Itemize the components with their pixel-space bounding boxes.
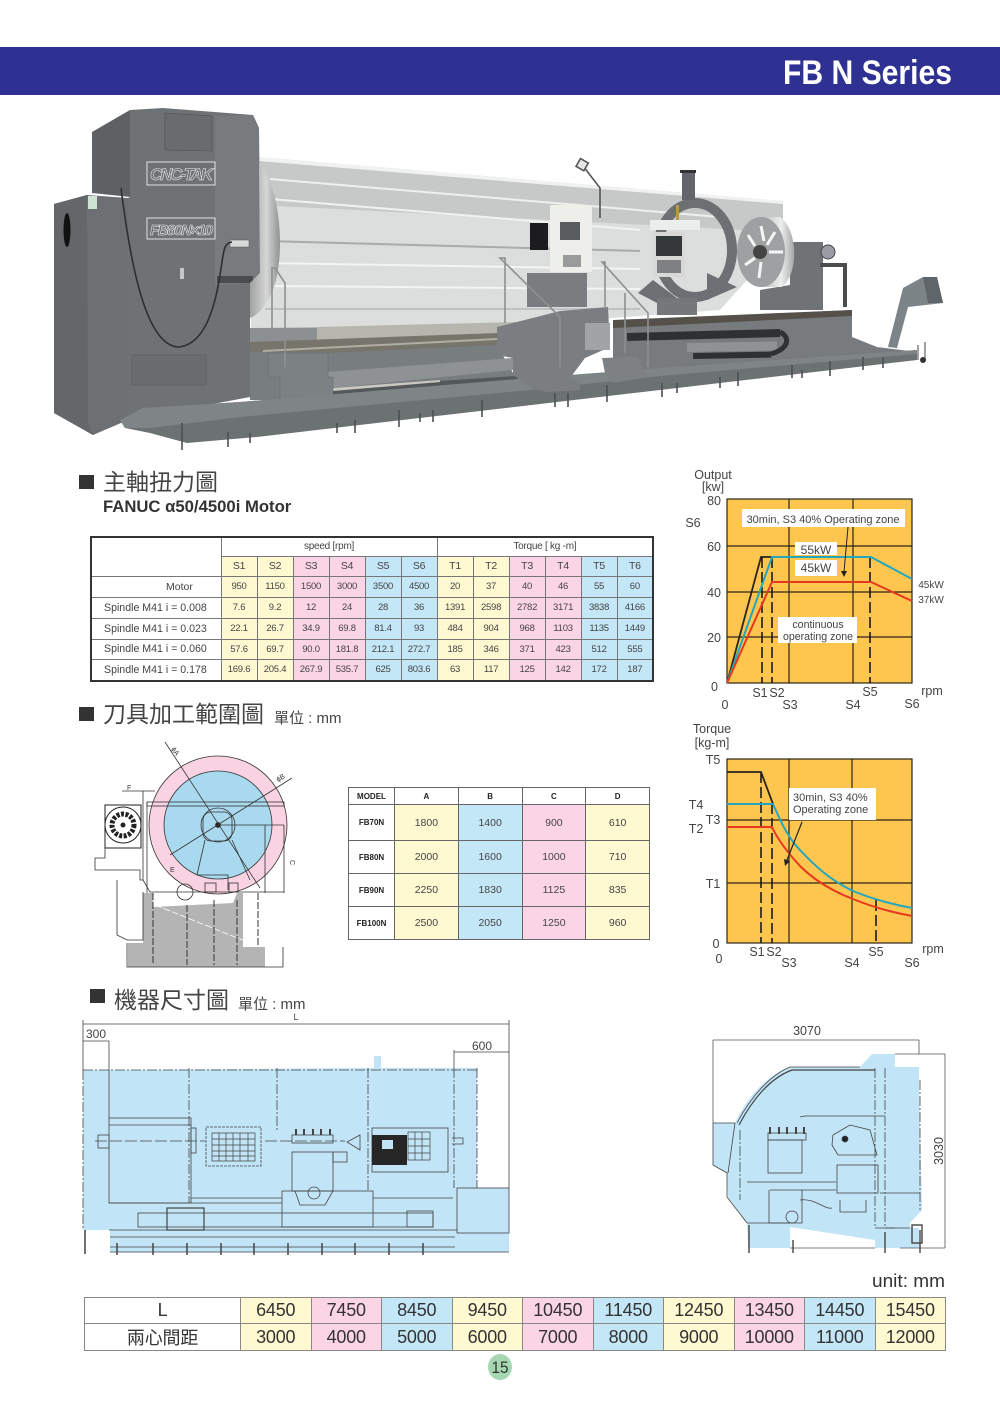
spindle speed and torque table: 968: [520, 623, 535, 634]
output power chart: [685, 468, 944, 712]
ventilation grids: [212, 1132, 430, 1161]
machine feet: [182, 357, 883, 450]
spindle speed and torque table: 512: [592, 644, 607, 654]
model dimensions table: 1830: [478, 884, 502, 896]
spindle speed and torque table: Spindle M41 i = 0.008: [104, 602, 207, 614]
zone callouts: continuous: [792, 619, 844, 631]
spindle speed and torque table: 187: [627, 664, 642, 675]
spindle speed and torque table: 57.6: [230, 644, 248, 654]
spindle speed and torque table: Torque [ kg -m]: [513, 541, 576, 552]
spindle speed and torque table: 272.7: [408, 644, 430, 654]
length and centre distance table: 12000: [886, 1326, 935, 1346]
torque axis labels: 0: [713, 937, 720, 951]
spindle speed and torque table: 555: [627, 644, 642, 654]
spindle speed and torque table: 3838: [589, 602, 609, 613]
spindle speed and torque table: [90, 536, 654, 682]
torque axis labels: rpm: [922, 942, 944, 956]
machine outline: [83, 1068, 509, 1252]
large chuck edge: [250, 163, 280, 318]
length and centre distance table: L: [158, 1300, 167, 1320]
length and centre distance table: 3000: [256, 1326, 295, 1346]
length and centre distance table: [84, 1297, 946, 1351]
long bed with covers: [250, 322, 530, 400]
section heading: dimensions: 單位 : mm: [238, 996, 306, 1013]
torque axis labels: [689, 722, 944, 970]
torque axis labels: S1: [749, 945, 765, 959]
length and centre distance table: 6450: [256, 1300, 295, 1320]
model dimensions table: FB100N: [357, 918, 386, 928]
section heading: spindle torque: [79, 469, 292, 516]
model dimensions table: 1250: [542, 917, 566, 929]
model dimensions table: 2000: [415, 851, 438, 863]
spindle speed and torque table: 36: [414, 602, 424, 613]
front elevation drawing: 600: [472, 1039, 492, 1053]
carriage and white controller: [497, 205, 648, 392]
length and centre distance table: 9450: [468, 1300, 507, 1320]
model dimensions table: 1125: [543, 884, 565, 896]
outer swing circle A: [149, 756, 287, 894]
length and centre distance table: 12450: [674, 1300, 723, 1320]
spindle speed and torque table: T1: [449, 560, 461, 572]
dimension 3070: [713, 1040, 945, 1248]
model dimensions table: 835: [609, 884, 626, 896]
spindle speed and torque table: 181.8: [336, 644, 358, 654]
axis labels: 45kW: [918, 580, 944, 591]
zone callouts: 30min, S3 40% Operating zone: [747, 514, 899, 526]
front elevation drawing: 300: [86, 1027, 106, 1041]
zone callouts: [742, 509, 905, 643]
spindle speed and torque table: Spindle M41 i = 0.178: [104, 664, 207, 676]
motor subtitle: FANUC α50/4500i Motor: [103, 497, 292, 516]
headstock: [760, 242, 847, 310]
torque axis labels: S2: [766, 945, 782, 959]
zone callouts: 45kW: [801, 561, 832, 575]
spindle tower: CNC-TAK: [150, 165, 215, 184]
front elevation drawing: [83, 1012, 509, 1255]
plot area: [727, 499, 912, 683]
length and centre distance table: 5000: [397, 1326, 436, 1346]
spindle speed and torque table: 20: [450, 581, 460, 592]
axis labels: [kw]: [702, 480, 724, 494]
axis labels: 20: [707, 631, 721, 645]
spindle speed and torque table: 185: [448, 644, 463, 654]
spindle speed and torque table: 46: [558, 581, 568, 592]
end view outline: [713, 1067, 920, 1228]
model dimensions table: FB80N: [359, 852, 384, 862]
zone callouts: operating zone: [783, 631, 853, 643]
model dimensions table: MODEL: [357, 792, 386, 800]
torque axis labels: T4: [689, 798, 703, 812]
spindle speed and torque table: S6: [413, 560, 425, 572]
spindle speed and torque table: 423: [556, 644, 571, 654]
spindle speed and torque table: 1449: [625, 623, 645, 634]
model dimensions table: 900: [545, 816, 563, 828]
length and centre distance table: 7000: [538, 1326, 577, 1346]
axis labels: 80: [707, 494, 721, 508]
spindle speed and torque table: 117: [484, 664, 498, 675]
model dimensions table: A: [423, 792, 429, 800]
axis labels: 0: [711, 680, 718, 694]
spindle speed and torque table: 4166: [625, 602, 645, 613]
spindle tower: FB80N×10: [150, 222, 214, 239]
axis labels: S5: [862, 685, 878, 699]
machine photo: CNC lathe: [54, 108, 943, 450]
model dimensions table: 2250: [415, 884, 438, 896]
axis labels: S6: [685, 516, 701, 530]
model dimensions table: [348, 787, 650, 940]
model dimensions table: 2500: [415, 917, 438, 929]
end elevation drawing: [713, 1024, 946, 1253]
spindle speed and torque table: T4: [557, 560, 569, 572]
spindle speed and torque table: 1135: [589, 623, 609, 634]
spindle speed and torque table: 3000: [337, 581, 357, 592]
spindle speed and torque table: 3500: [373, 581, 393, 592]
model dimensions table: 2050: [478, 917, 502, 929]
unit label: unit: mm: [872, 1271, 945, 1291]
torque axis labels: S6: [904, 956, 920, 970]
spindle speed and torque table: 4500: [409, 581, 429, 592]
spindle speed and torque table: Spindle M41 i = 0.023: [104, 622, 207, 634]
elevation silhouette: [83, 1056, 509, 1252]
spindle speed and torque table: S3: [305, 560, 317, 572]
axis labels: 60: [707, 540, 721, 554]
torque plot area: [727, 759, 912, 943]
front elevation drawing: L: [293, 1012, 299, 1022]
spindle speed and torque table: 142: [556, 664, 571, 675]
model dimensions table: 1800: [415, 816, 438, 828]
section heading: dimensions: [90, 987, 306, 1013]
model dimensions table: 960: [609, 917, 626, 929]
torque axis labels: Torque: [693, 722, 731, 736]
model dimensions table: 1600: [478, 851, 502, 863]
spindle speed and torque table: 12: [306, 602, 316, 613]
spindle speed and torque table: 172: [592, 664, 607, 675]
axis labels: Output: [694, 468, 732, 482]
spindle speed and torque table: 7.6: [233, 602, 245, 613]
spindle speed and torque table: Motor: [166, 580, 193, 592]
spindle speed and torque table: 26.7: [266, 623, 284, 634]
spindle speed and torque table: 1150: [265, 581, 285, 592]
length and centre distance table: 8450: [397, 1300, 436, 1320]
tool range diagram: ϕB: [276, 773, 287, 784]
spindle speed and torque table: 9.2: [269, 602, 281, 613]
torque callout: 30min, S3 40%: [793, 792, 868, 804]
spindle speed and torque table: speed [rpm]: [304, 541, 354, 552]
control block: [372, 1135, 407, 1165]
spindle speed and torque table: 1103: [553, 623, 573, 634]
length and centre distance table: 11000: [816, 1326, 864, 1346]
spindle speed and torque table: 169.6: [228, 664, 250, 675]
model dimensions table: C: [551, 792, 557, 800]
dimension lines: [83, 1020, 509, 1188]
spindle speed and torque table: 346: [484, 644, 499, 654]
length and centre distance table: 15450: [886, 1300, 935, 1320]
feet: [85, 1230, 423, 1255]
spindle speed and torque table: 484: [448, 623, 463, 634]
inner swing circle B: [164, 771, 272, 879]
length and centre distance table: 9000: [679, 1326, 718, 1346]
feet of end view: [749, 1225, 922, 1253]
turret: [105, 805, 141, 848]
torque chart: [689, 722, 944, 970]
spindle speed and torque table: 1500: [301, 581, 321, 592]
spindle speed and torque table: 125: [520, 664, 535, 675]
NC operation panel: [650, 220, 700, 277]
spindle speed and torque table: 803.6: [408, 664, 430, 675]
stair rails and work lamp: [272, 159, 648, 367]
header band: [0, 47, 1000, 95]
spindle speed and torque table: 535.7: [336, 664, 358, 675]
spindle speed and torque table: 625: [375, 664, 391, 675]
spindle speed and torque table: 2782: [517, 602, 537, 613]
model dimensions table: 1000: [542, 851, 566, 863]
spindle speed and torque table: T3: [521, 560, 533, 572]
page number badge: 15: [492, 1358, 508, 1377]
section heading: tool range: 刀具加工範圍圖: [103, 701, 264, 727]
torque axis labels: [kg-m]: [695, 736, 729, 750]
model dimensions table: D: [615, 792, 621, 800]
spindle speed and torque table: 81.4: [374, 623, 392, 634]
tool range diagram: [95, 742, 295, 967]
length and centre distance table: 6000: [468, 1326, 507, 1346]
base plinth: [120, 350, 917, 443]
spindle speed and torque table: S5: [377, 560, 389, 572]
axis labels: rpm: [921, 684, 943, 698]
model dimensions table: 1400: [478, 816, 502, 828]
dimension 3030: 3030: [932, 1137, 946, 1165]
guard panel: [250, 157, 783, 345]
spindle speed and torque table: S4: [341, 560, 353, 572]
length and centre distance table: 10450: [533, 1300, 582, 1320]
spindle speed and torque table: S1: [233, 560, 245, 572]
model dimensions table: FB90N: [359, 886, 384, 894]
axis labels: S4: [845, 698, 861, 712]
torque axis labels: T3: [706, 813, 720, 827]
torque axis labels: T2: [689, 822, 703, 836]
axis labels: 40: [707, 586, 721, 600]
section heading: tool range: [79, 701, 342, 727]
torque axis labels: T5: [706, 753, 720, 767]
spindle speed and torque table: T2: [485, 560, 497, 572]
length and centre distance table: 13450: [745, 1300, 794, 1320]
axis labels: 0: [722, 698, 729, 712]
spindle speed and torque table: 55: [594, 581, 604, 592]
spindle speed and torque table: 40: [522, 581, 532, 592]
spindle speed and torque table: 37: [486, 581, 496, 592]
grey bed section: [128, 893, 265, 967]
spindle cable: [121, 188, 232, 347]
drawing linework: [95, 742, 292, 967]
end silhouette: [713, 1054, 922, 1248]
spindle speed and torque table: T5: [593, 560, 605, 572]
end elevation drawing: 3070: [793, 1024, 821, 1038]
axis labels: S3: [782, 698, 798, 712]
axis labels: [685, 468, 944, 712]
spindle speed and torque table: 267.9: [300, 664, 322, 675]
torque axis labels: S3: [781, 956, 797, 970]
model dimensions table: B: [487, 792, 493, 800]
curves: [727, 557, 772, 683]
spindle speed and torque table: S2: [269, 560, 281, 572]
page number badge: [488, 1354, 512, 1380]
torque callout: Operating zone: [793, 804, 868, 816]
left electrical cabinet: [54, 195, 128, 435]
spindle speed and torque table: Spindle M41 i = 0.060: [104, 643, 207, 655]
spindle speed and torque table: 371: [520, 644, 535, 654]
torque callout: [784, 788, 876, 866]
torque axis labels: S5: [868, 945, 884, 959]
axis labels: S1: [752, 686, 768, 700]
tool range diagram: C: [288, 860, 295, 865]
length and centre distance table: 7450: [327, 1300, 366, 1320]
model dimensions table: 610: [609, 816, 626, 828]
length and centre distance table: 8000: [609, 1326, 648, 1346]
spindle speed and torque table: 2598: [481, 602, 501, 613]
length and centre distance table: 14450: [815, 1300, 864, 1320]
spindle speed and torque table: 90.0: [302, 644, 320, 654]
torque axis labels: 0: [716, 952, 723, 966]
faceplate chuck: [737, 217, 794, 287]
spindle speed and torque table: 1391: [445, 602, 465, 613]
steady rest ring: [638, 170, 737, 315]
spindle speed and torque table: 22.1: [230, 623, 248, 634]
drawing linework: F: [127, 785, 131, 792]
spindle speed and torque table: 69.7: [266, 644, 284, 654]
spindle speed and torque table: 904: [484, 623, 499, 634]
tool range diagram: E: [170, 867, 175, 874]
spindle speed and torque table: 28: [378, 602, 388, 613]
model dimensions table: FB70N: [359, 818, 384, 827]
model dimensions table: 710: [609, 851, 626, 863]
length and centre distance table: 4000: [327, 1326, 366, 1346]
axis labels: S2: [769, 686, 785, 700]
right bed: [613, 310, 917, 380]
section heading: spindle torque: 主軸扭力圖: [103, 469, 218, 495]
spindle speed and torque table: 950: [231, 581, 247, 592]
torque curves: [727, 772, 773, 804]
section heading: tool range: 單位 : mm: [274, 710, 342, 727]
tool range diagram: ϕA: [169, 746, 180, 757]
spindle tower: [92, 108, 260, 420]
spindle speed and torque table: T6: [629, 560, 641, 572]
spindle speed and torque table: 205.4: [264, 664, 286, 675]
section heading: dimensions: 機器尺寸圖: [114, 987, 229, 1013]
spindle speed and torque table: 3171: [553, 602, 573, 613]
length and centre distance table: 11450: [604, 1300, 652, 1320]
spindle speed and torque table: 34.9: [302, 623, 320, 634]
axis labels: 37kW: [918, 595, 944, 606]
length and centre distance table: 兩心間距: [127, 1328, 198, 1348]
spindle speed and torque table: 24: [342, 602, 352, 613]
length and centre distance table: 10000: [745, 1326, 794, 1346]
spindle speed and torque table: 63: [450, 664, 460, 675]
axis labels: S6: [904, 697, 920, 711]
torque axis labels: T1: [706, 877, 720, 891]
series title: FB N Series: [783, 54, 952, 92]
zone callouts: 55kW: [801, 543, 832, 557]
spindle speed and torque table: 212.1: [372, 644, 394, 654]
spindle speed and torque table: 93: [414, 623, 424, 634]
spindle speed and torque table: 60: [630, 581, 640, 592]
torque axis labels: S4: [844, 956, 860, 970]
chip conveyor: [888, 277, 943, 363]
spindle speed and torque table: 69.8: [338, 623, 356, 634]
